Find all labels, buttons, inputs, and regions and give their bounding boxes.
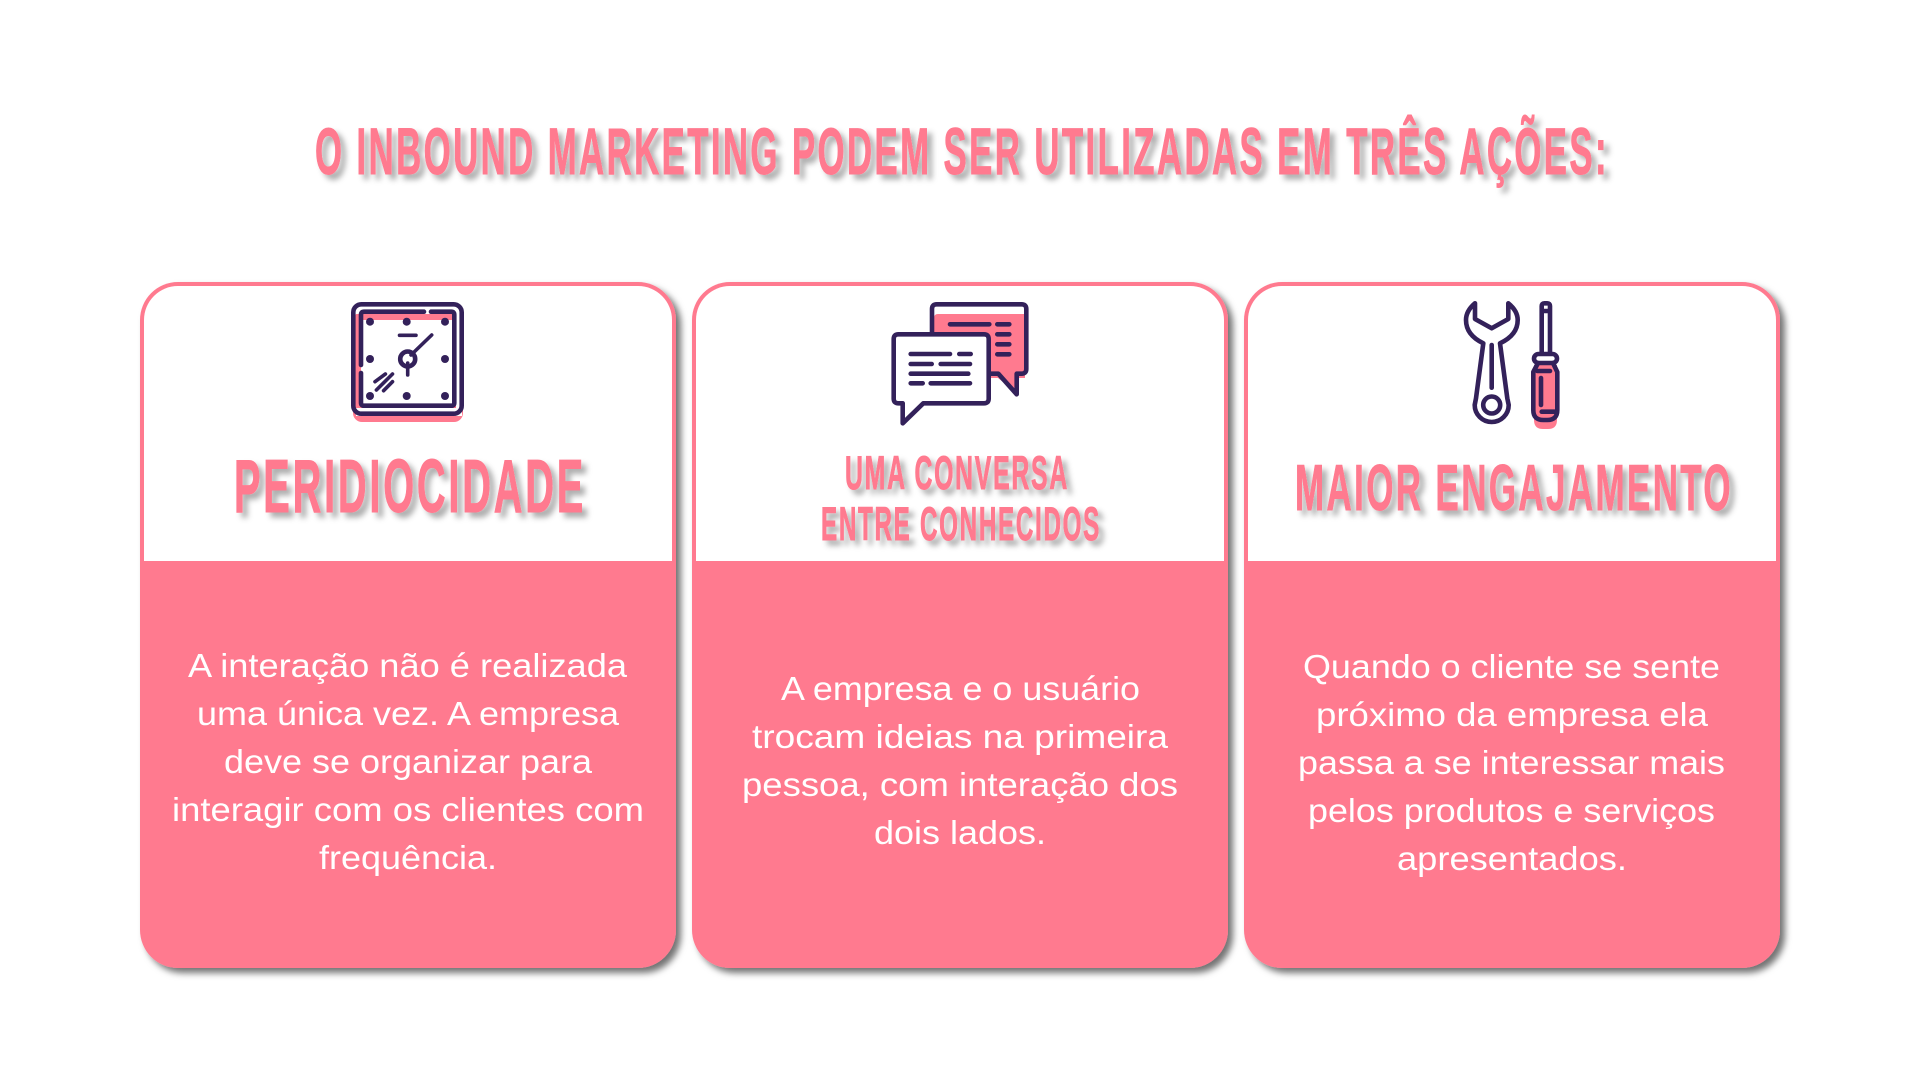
body text: deve se organizar para: [224, 743, 593, 780]
body text: A interação não é realizada: [188, 647, 628, 684]
heading: UMA CONVERSA: [845, 446, 1069, 499]
card white header: [144, 286, 672, 561]
panel: maior engajamento: [1244, 282, 1780, 968]
body text: dois lados.: [874, 814, 1046, 851]
card white header: [1248, 286, 1776, 561]
icon: wrench and screwdriver: [1466, 303, 1557, 429]
body text: interagir com os clientes com: [172, 791, 644, 828]
panel: uma conversa: [692, 282, 1228, 968]
heading: PERIDIOCIDADE: [234, 444, 586, 528]
body text: pelos produtos e serviços: [1308, 792, 1715, 829]
body text: uma única vez. A empresa: [197, 695, 620, 732]
body text: próximo da empresa ela: [1316, 696, 1709, 733]
body text: passa a se interessar mais: [1298, 744, 1725, 781]
body text: [172, 647, 644, 876]
icon: chat bubbles: [894, 304, 1026, 423]
body text: apresentados.: [1397, 840, 1627, 877]
body text: A empresa e o usuário: [781, 670, 1140, 707]
card white header: [696, 286, 1224, 561]
card background: [692, 282, 1228, 968]
body text: trocam ideias na primeira: [752, 718, 1169, 755]
body text: pessoa, com interação dos: [742, 766, 1178, 803]
card background: [1244, 282, 1780, 968]
panel: peridiocidade: [140, 282, 676, 968]
heading: [821, 446, 1101, 550]
icon: clock: [353, 304, 463, 422]
heading: ENTRE CONHECIDOS: [821, 497, 1101, 550]
body text: [742, 670, 1178, 851]
body text: [1298, 648, 1725, 877]
body text: Quando o cliente se sente: [1303, 648, 1720, 685]
card background: [140, 282, 676, 968]
body text: frequência.: [319, 839, 497, 876]
